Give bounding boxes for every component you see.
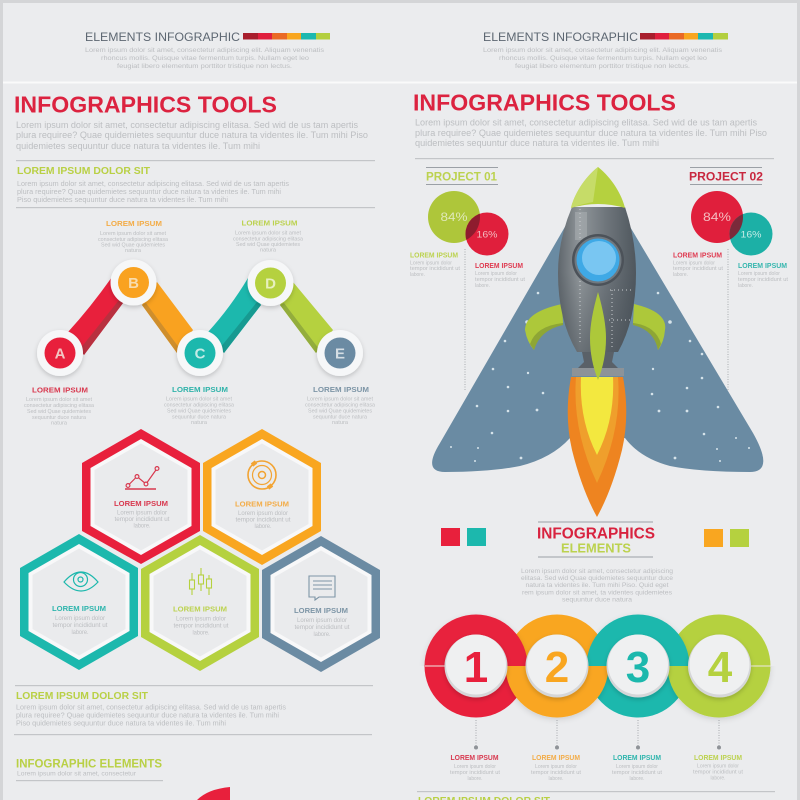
- left header: [85, 30, 330, 70]
- step 3 label: labore.: [630, 776, 644, 782]
- infographic elements heading: INFOGRAPHIC ELEMENTS: [16, 758, 162, 770]
- number 2: 2: [545, 643, 569, 692]
- dotted connector: [464, 249, 466, 390]
- number 4: 4: [708, 643, 733, 692]
- label right: [738, 263, 789, 289]
- step 4 label: [693, 755, 744, 782]
- window: [572, 234, 624, 286]
- step 3 label: tempor incididunt ut: [612, 770, 663, 776]
- wings: [525, 304, 665, 350]
- right header text: Lorem ipsum dolor sit amet, consectetur adipiscing elit. Aliquam venenatis: [483, 47, 723, 54]
- label B: [98, 219, 169, 254]
- label A: [24, 386, 95, 426]
- project 02 heading: PROJECT 02: [689, 172, 763, 184]
- 16 percent: 16%: [476, 230, 498, 240]
- number 1: 1: [464, 643, 488, 692]
- step 2 label: labore.: [548, 776, 564, 782]
- label E: Sed wid Quae quidemietes: [308, 408, 372, 414]
- slate hexagon label: [294, 606, 350, 638]
- step 3 label: [612, 755, 663, 782]
- lower left text: Piso quidemietes sequuntur duce natura ta videntes ile. Tum mihi: [16, 718, 226, 728]
- label A: natura: [51, 420, 68, 426]
- nozzle neck: [578, 352, 618, 368]
- label B: Lorem ipsum dolor sit amet: [100, 231, 166, 237]
- red hexagon label: tempor incididunt ut: [114, 517, 170, 523]
- left intro paragraph: quidemietes sequuntur duce natura ta videntes ile. Tum mihi: [16, 141, 260, 151]
- label E: natura: [332, 420, 349, 426]
- label left: Lorem ipsum dolor: [673, 260, 715, 266]
- left title: INFOGRAPHICS TOOLS: [14, 92, 277, 118]
- right colour bar: [640, 33, 728, 40]
- green hexagon label: tempor incididunt ut: [174, 624, 229, 630]
- lower left text: [16, 702, 286, 728]
- node D: D: [265, 276, 276, 292]
- step 4 label: Lorem ipsum dolor: [697, 764, 739, 770]
- rivets: [580, 205, 634, 350]
- slate hexagon label: tempor incididunt ut: [294, 625, 350, 631]
- teal hexagon label: tempor incididunt ut: [52, 623, 108, 629]
- label E: sequuntur duce natura: [313, 414, 368, 420]
- venn circles: [428, 191, 508, 256]
- label left: labore.: [673, 272, 688, 278]
- label E: consectetur adipiscing elitasa: [305, 402, 376, 408]
- label A: LOREM IPSUM: [32, 386, 88, 394]
- red hexagon label: labore.: [134, 524, 151, 530]
- label right: labore.: [738, 283, 753, 289]
- lower left heading: LOREM IPSUM DOLOR SIT: [16, 690, 149, 702]
- step 2 label: LOREM IPSUM: [532, 755, 580, 762]
- label C: Lorem ipsum dolor sit amet: [166, 396, 232, 402]
- left header title: ELEMENTS INFOGRAPHIC: [85, 30, 240, 44]
- ribbon B-C: [142, 282, 193, 353]
- hexagon: red: [82, 429, 200, 564]
- elements paragraph: natura ta videntes ile. Tum mihi Piso. Quid eget: [526, 582, 669, 589]
- label left: labore.: [410, 272, 425, 278]
- left header text: [85, 47, 325, 70]
- label E: Lorem ipsum dolor sit amet: [307, 396, 373, 402]
- number 3: [606, 634, 670, 698]
- label C: [164, 385, 235, 426]
- label E: LOREM IPSUM: [313, 385, 369, 394]
- space triangle: [432, 225, 763, 472]
- label B: LOREM IPSUM: [106, 219, 162, 228]
- nose cone: [571, 167, 625, 208]
- node D: [248, 260, 294, 306]
- icon: target dial: [248, 461, 276, 489]
- right header title: ELEMENTS INFOGRAPHIC: [483, 30, 638, 44]
- infographic elements subtext: Lorem ipsum dolor sit amet, consectetur: [17, 770, 137, 778]
- slate hexagon label: labore.: [314, 632, 331, 638]
- venn circles: [691, 191, 772, 256]
- left header text: Lorem ipsum dolor sit amet, consectetur adipiscing elit. Aliquam venenatis: [85, 47, 325, 54]
- slate hexagon label: LOREM IPSUM: [294, 606, 348, 615]
- label A: consectetur adipiscing elitasa: [24, 403, 95, 409]
- 84 percent: 84%: [703, 212, 731, 224]
- rocket illustration: [432, 167, 763, 517]
- label C: consectetur adipiscing elitasa: [164, 402, 235, 408]
- right intro paragraph: plura requiree? Quae quidemietes sequuntur duce natura ta videntes ile. Tum mihi Piso: [415, 128, 767, 138]
- right title: INFOGRAPHICS TOOLS: [413, 90, 676, 116]
- label D: [233, 218, 304, 254]
- orange hexagon label: Lorem ipsum dolor: [238, 511, 288, 517]
- label left: tempor incididunt ut: [410, 266, 461, 272]
- numbered circles: [424, 614, 771, 718]
- label right: [475, 263, 526, 289]
- step 2 label: Lorem ipsum dolor: [535, 764, 577, 770]
- label C: Sed wid Quae quidemietes: [167, 408, 231, 414]
- label left: [410, 252, 461, 278]
- step 1 label: LOREM IPSUM: [450, 755, 499, 762]
- label left: LOREM IPSUM: [410, 252, 458, 260]
- label A: sequuntur duce natura: [32, 415, 87, 421]
- step 1 label: tempor incididunt ut: [450, 770, 501, 776]
- hexagon: teal: [20, 534, 138, 670]
- ribbon A-B: [68, 277, 123, 355]
- label right: LOREM IPSUM: [738, 263, 787, 270]
- rocket body: [558, 207, 636, 352]
- hexagon: orange: [203, 429, 321, 565]
- colour squares right: [704, 529, 749, 547]
- step 3 label: Lorem ipsum dolor: [616, 764, 658, 770]
- label B: consectetur adipiscing elitasa: [98, 237, 169, 243]
- project 02: [673, 167, 789, 390]
- step 1 label: [450, 755, 501, 782]
- label D: Sed wid Quae quidemietes: [236, 242, 300, 248]
- icon: eye: [64, 572, 98, 591]
- project 01: [410, 167, 526, 390]
- step 3 label: LOREM IPSUM: [613, 755, 661, 762]
- left section text: plura requiree? Quae quidemietes sequuntur duce natura ta videntes ile. Tum mihi: [17, 187, 281, 196]
- left header text: feugiat libero elementum porttitor tristique non lectus.: [117, 63, 292, 70]
- node B: B: [128, 275, 139, 292]
- number 3: 3: [626, 643, 650, 692]
- number 1: [444, 634, 508, 698]
- orange hexagon label: LOREM IPSUM: [235, 500, 289, 508]
- label D: natura: [260, 248, 277, 254]
- step 2 label: tempor incididunt ut: [531, 770, 582, 776]
- label D: LOREM IPSUM: [242, 218, 298, 228]
- left intro paragraph: plura requiree? Quae quidemietes sequuntur duce natura ta videntes ile. Tum mihi Piso: [16, 130, 368, 140]
- step 4 label: tempor incididunt ut: [693, 770, 744, 776]
- nozzle plate: [572, 368, 624, 376]
- label left: Lorem ipsum dolor: [410, 260, 452, 266]
- left section heading: LOREM IPSUM DOLOR SIT: [17, 165, 151, 177]
- lower left text: plura requiree? Quae quidemietes sequuntur duce natura ta videntes ile. Tum mihi: [16, 710, 279, 720]
- label left: LOREM IPSUM: [673, 252, 722, 260]
- red hexagon label: Lorem ipsum dolor: [117, 510, 167, 516]
- step 4 label: labore.: [710, 776, 726, 782]
- 84 percent: 84%: [440, 212, 468, 224]
- ribbon C-D: [208, 278, 261, 353]
- right intro paragraph: [415, 118, 767, 148]
- hexagon: slate: [262, 536, 380, 672]
- red hexagon label: [114, 499, 170, 530]
- infographics word: INFOGRAPHICS: [537, 526, 655, 542]
- label right: LOREM IPSUM: [475, 263, 523, 270]
- elements heading: [537, 522, 655, 558]
- right intro paragraph: Lorem ipsum dolor sit amet, consectetur adipiscing elitasa. Sed wid de us tam apertis: [415, 118, 757, 128]
- center fin: [590, 292, 606, 380]
- teal hexagon label: LOREM IPSUM: [52, 604, 106, 613]
- label C: LOREM IPSUM: [172, 385, 228, 394]
- left section text: Lorem ipsum dolor sit amet, consectetur adipiscing elitasa. Sed wid de us tam apertis: [17, 179, 289, 188]
- teal hexagon label: [52, 604, 108, 636]
- green hexagon label: [173, 604, 229, 636]
- step 2 label: [531, 755, 582, 782]
- icon: speech bubble: [309, 576, 335, 600]
- label D: Lorem ipsum dolor sit amet: [235, 230, 301, 236]
- node A: [37, 330, 83, 376]
- hexagon: green: [141, 535, 259, 671]
- zigzag timeline: [37, 260, 363, 376]
- label left: [673, 252, 724, 278]
- left colour bar: [243, 33, 330, 40]
- dotted connector: [727, 249, 729, 390]
- left section text: [17, 179, 289, 204]
- panel divider: [3, 82, 797, 84]
- number 4: [688, 634, 751, 698]
- connectors: [474, 720, 721, 750]
- step 4 label: LOREM IPSUM: [694, 755, 742, 762]
- teal hexagon label: Lorem ipsum dolor: [55, 616, 105, 622]
- teal hexagon label: labore.: [72, 630, 89, 636]
- right intro paragraph: quidemietes sequuntur duce natura ta videntes ile. Tum mihi: [415, 138, 659, 148]
- elements paragraph: sequuntur duce natura: [562, 596, 633, 604]
- green hexagon label: labore.: [192, 630, 210, 636]
- flame: [568, 377, 626, 517]
- label A: Lorem ipsum dolor sit amet: [26, 397, 92, 403]
- label right: tempor incididunt ut: [475, 277, 526, 283]
- node E: E: [335, 346, 345, 362]
- label C: sequuntur duce natura: [172, 414, 227, 420]
- node A: A: [55, 346, 66, 362]
- icon: line chart: [125, 467, 159, 489]
- label right: tempor incididunt ut: [738, 277, 789, 283]
- label D: consectetur adipiscing elitasa: [233, 236, 304, 242]
- elements word: ELEMENTS: [561, 542, 631, 556]
- lower left text: Lorem ipsum dolor sit amet, consectetur adipiscing elitasa. Sed wid de us tam apertis: [16, 702, 286, 712]
- orange hexagon label: labore.: [254, 524, 272, 530]
- right header text: feugiat libero elementum porttitor tristique non lectus.: [515, 63, 690, 70]
- right header text: rhoncus mollis. Quisque vitae fermentum turpis. Nullam eget leo: [499, 55, 707, 62]
- left header text: rhoncus mollis. Quisque vitae fermentum turpis. Nullam eget leo: [101, 55, 309, 62]
- number 2: [526, 634, 588, 698]
- project 01 heading: PROJECT 01: [426, 172, 498, 184]
- red pie chart fragment: [197, 787, 230, 800]
- node E: [317, 330, 363, 376]
- right header: [483, 30, 728, 70]
- label right: Lorem ipsum dolor: [475, 271, 517, 277]
- left intro paragraph: Lorem ipsum dolor sit amet, consectetur adipiscing elitasa. Sed wid de us tam apertis: [16, 120, 358, 130]
- step 1 label: labore.: [468, 776, 482, 782]
- step 1 label: Lorem ipsum dolor: [454, 764, 496, 770]
- label B: natura: [125, 248, 142, 254]
- label E: [305, 385, 376, 426]
- orange hexagon label: tempor incididunt ut: [236, 518, 291, 524]
- node C: [177, 330, 223, 376]
- icon: candlesticks: [190, 568, 212, 595]
- green hexagon label: Lorem ipsum dolor: [176, 616, 226, 622]
- elements paragraph: Lorem ipsum dolor sit amet, consectetur adipiscing: [521, 568, 674, 575]
- left section text: Piso quidemietes sequuntur duce natura ta videntes ile. Tum mihi: [17, 195, 228, 204]
- orange hexagon label: [235, 500, 291, 530]
- node C: C: [195, 346, 206, 362]
- node B: [110, 260, 156, 306]
- stars: [450, 292, 750, 462]
- label left: tempor incididunt ut: [673, 266, 724, 272]
- red hexagon label: LOREM IPSUM: [114, 499, 168, 508]
- label B: Sed wid Quae quidemietes: [101, 242, 165, 248]
- interlocked rings: [424, 614, 771, 718]
- right header text: [483, 47, 723, 70]
- label right: labore.: [475, 283, 490, 289]
- left intro paragraph: [16, 120, 368, 151]
- ribbon D-E: [280, 282, 333, 353]
- elements paragraph: rem ipsum dolor sit amet, ta videntes quidemietes: [522, 590, 672, 596]
- label right: Lorem ipsum dolor: [738, 271, 780, 277]
- elements paragraph: [521, 568, 674, 604]
- label A: Sed wid Quae quidemietes: [27, 409, 91, 415]
- colour squares left: [441, 528, 486, 546]
- label C: natura: [191, 420, 208, 426]
- slate hexagon label: Lorem ipsum dolor: [297, 618, 347, 624]
- 16 percent: 16%: [740, 230, 762, 240]
- green hexagon label: LOREM IPSUM: [173, 604, 227, 614]
- elements paragraph: elitasa. Sed wid Quae quidemietes sequuntur duce: [521, 575, 674, 582]
